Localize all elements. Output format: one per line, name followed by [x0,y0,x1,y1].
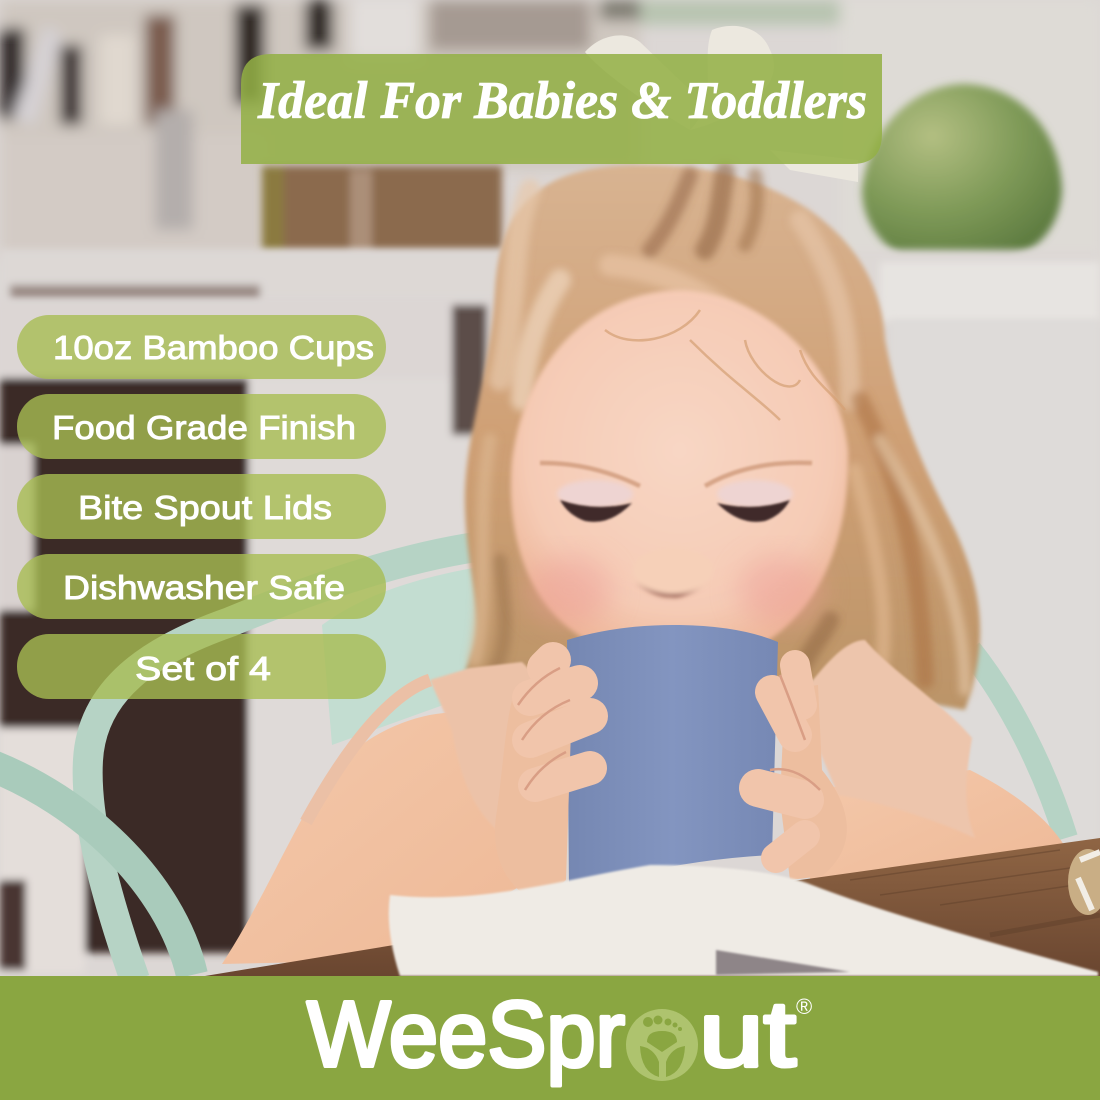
table [205,838,1100,976]
wooden teether [1068,849,1100,915]
title text: Ideal For Babies & Toddlers [257,72,867,130]
footprint sole [647,1031,677,1052]
cheeks [528,556,822,624]
eyelashes [560,500,790,522]
right hand [758,665,847,880]
hair bow [585,26,858,182]
pill: Dishwasher Safe: Dishwasher Safe [63,569,345,606]
logo wordmark [307,982,812,1086]
wood grain [850,850,1100,935]
hair mass [465,165,980,710]
pill: 10oz Bamboo Cups [17,315,386,379]
eyelids [557,480,793,508]
background: basket [262,166,502,250]
pill: Set of 4: Set of 4 [135,650,271,687]
face [511,290,848,646]
logo sprout icon [626,1009,698,1081]
logo wordmark: ut [699,982,796,1086]
background: dark left cabinet opening [0,300,500,973]
fork [716,950,850,975]
right palm [780,685,847,880]
dress: left ruffle [430,662,550,830]
left palm [495,690,572,905]
footer band [0,976,1100,1100]
pill: Bite Spout Lids [17,474,386,539]
footprint toes [643,1016,682,1031]
cup [567,625,778,892]
right knuckle creases [770,675,820,790]
sprout leaves [640,1046,685,1077]
nose [633,548,713,597]
left arm [222,712,530,964]
right arm [810,770,1064,885]
background: green melon [862,84,1062,257]
hair strands [475,172,965,690]
right fingers [758,665,805,858]
dress: right ruffle [805,640,975,838]
chair back [0,545,1066,980]
left hand [495,660,590,905]
pill: Food Grade Finish [17,394,386,459]
feature pills [17,315,386,699]
background: right cabinets [890,320,1100,980]
background: counter ledge [0,250,1100,322]
left knuckle creases [518,668,570,790]
pill: Set of 4 [17,634,386,699]
pill: 10oz Bamboo Cups: 10oz Bamboo Cups [53,329,374,366]
pill: Bite Spout Lids: Bite Spout Lids [78,489,332,526]
girl [222,165,1064,964]
eyebrows [540,463,812,486]
dress: left strap [306,680,430,822]
pill: Dishwasher Safe [17,554,386,619]
logo wordmark: ® [796,994,812,1019]
left fingers [530,660,590,785]
napkin [389,865,1098,976]
title banner [241,54,882,164]
pill: Food Grade Finish: Food Grade Finish [52,409,356,446]
background: upper shelves and objects [0,0,1100,270]
forehead wisps [605,310,845,420]
logo wordmark: WeeSpr [307,982,625,1086]
